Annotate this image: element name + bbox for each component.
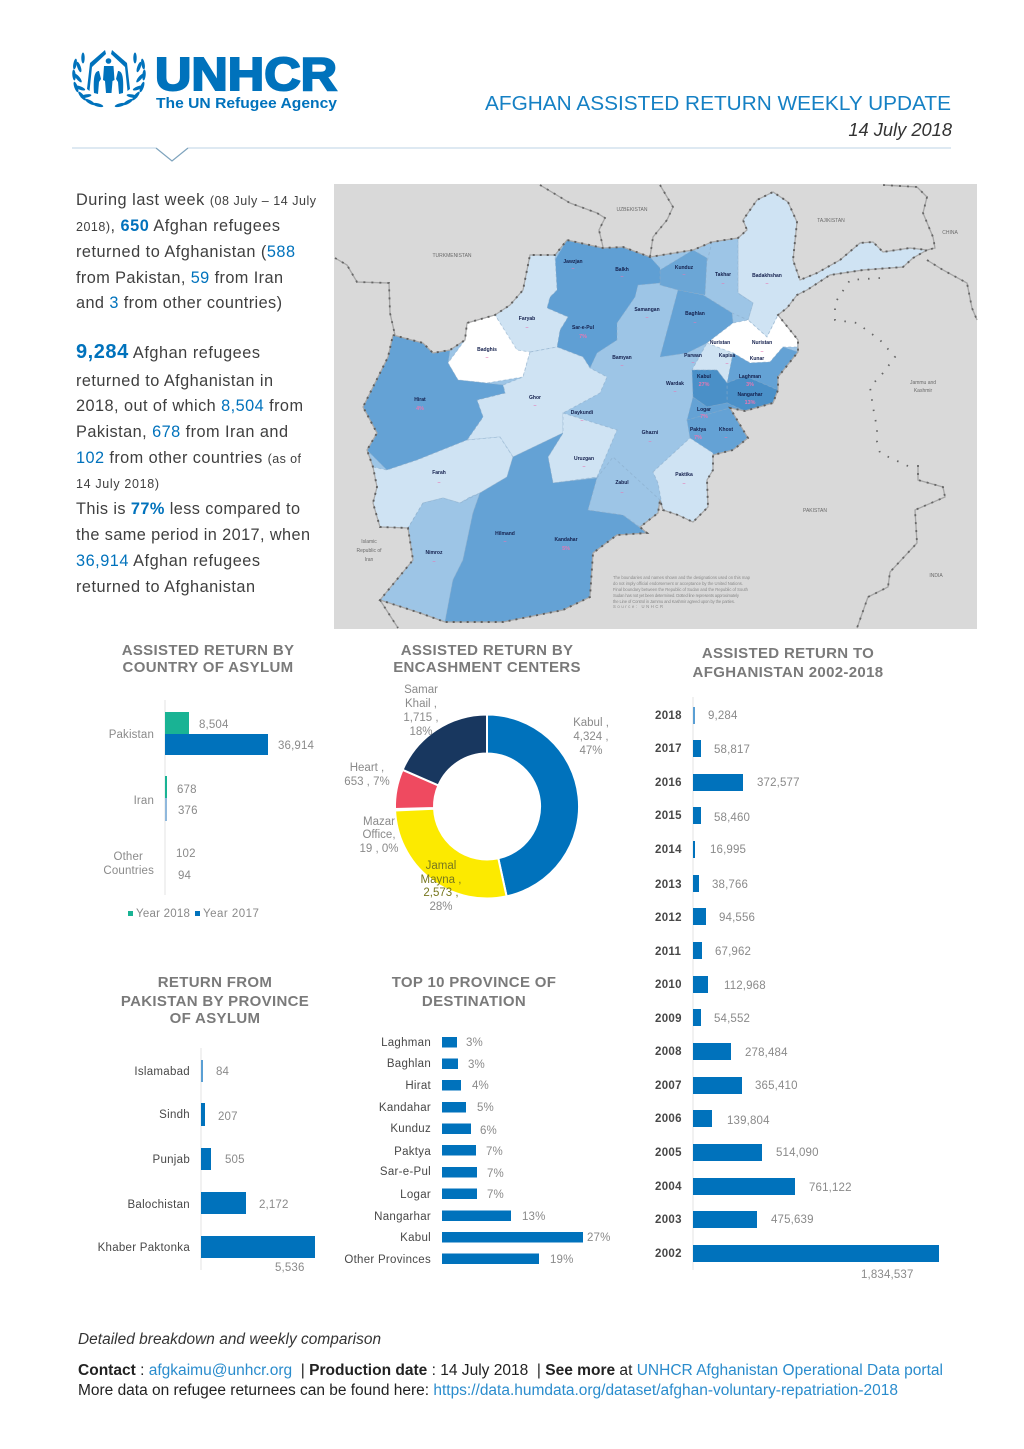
country labels: INDIA: [929, 573, 943, 579]
province labels: Bamyan: [612, 355, 632, 361]
year labels: [655, 710, 682, 1260]
province labels: 27%: [699, 382, 710, 388]
footer: contact line: Contact : afgkaimu@unhcr.org | Production date : 14 July 2018 | See more at UNHCR Afghanistan Operational Data portal: [78, 1362, 943, 1379]
province labels: 7%: [694, 435, 702, 441]
value labels: 5%: [477, 1102, 494, 1114]
category labels: Nangarhar: [374, 1211, 431, 1223]
province labels: Kapisa: [719, 353, 735, 359]
icon: chevron: [156, 148, 188, 161]
Afghanistan border: [363, 192, 927, 622]
chart: top 10 province of destination: [344, 974, 610, 1266]
province labels: 3%: [746, 382, 754, 388]
province: Nuristan and Panjshir: [707, 315, 798, 363]
year labels: 2013: [655, 879, 682, 891]
year labels: 2014: [655, 844, 682, 856]
donut labels: 28%: [429, 901, 453, 913]
value labels: 3%: [466, 1037, 483, 1049]
text block: 2018 summary: Pakistan, 678 from Iran and: [76, 423, 288, 441]
province labels: –: [534, 403, 536, 409]
year labels: 2011: [655, 946, 681, 958]
map disclaimer: The boundaries and names shown and the designations used on this map: [613, 575, 751, 580]
province: Takhar: [703, 238, 753, 320]
donut labels: 18%: [409, 726, 433, 738]
province labels: Nuristan: [710, 340, 730, 346]
province labels: Kabul: [697, 374, 712, 380]
text block: 2018 summary: returned to Afghanistan in: [76, 372, 273, 390]
category labels: Islamabad: [134, 1066, 190, 1078]
province: Paktika: [653, 438, 713, 522]
category labels: Paktya: [394, 1146, 431, 1158]
value labels: 475,639: [771, 1214, 814, 1226]
category labels: [344, 1037, 432, 1266]
map disclaimer: Final boundary between the Republic of Sudan and the Republic of South: [613, 587, 749, 592]
year labels: 2016: [655, 777, 682, 789]
province: Hirat: [363, 335, 505, 470]
logo tagline: The UN Refugee Agency: [156, 96, 337, 112]
year labels: 2002: [655, 1248, 682, 1260]
year labels: 2007: [655, 1080, 682, 1092]
category labels: Countries: [103, 865, 154, 877]
value labels: 505: [225, 1154, 245, 1166]
value labels: [216, 1066, 305, 1274]
province labels: –: [620, 274, 624, 280]
bars: [442, 1037, 583, 1264]
category labels: Punjab: [152, 1154, 190, 1166]
value labels: 678: [177, 784, 197, 796]
country labels: Islamic: [361, 539, 377, 545]
province labels: –: [674, 389, 676, 395]
province labels: [414, 259, 782, 565]
province labels: 13%: [745, 400, 756, 406]
value labels: 372,577: [757, 777, 800, 789]
legend: [128, 908, 259, 920]
chart title: ASSISTED RETURN BY: [122, 642, 294, 659]
country labels: [356, 207, 958, 579]
chart title: OF ASYLUM: [170, 1010, 260, 1027]
value labels: 9,284: [708, 710, 738, 722]
category labels: Other: [113, 851, 143, 863]
country labels: PAKISTAN: [803, 508, 827, 514]
province labels: Kandahar: [554, 537, 578, 543]
province labels: Kunduz: [675, 265, 694, 271]
value labels: 16,995: [710, 844, 746, 856]
header divider: [72, 147, 951, 149]
category labels: Iran: [134, 795, 154, 807]
province labels: Nuristan: [752, 340, 772, 346]
map disclaimer: Source: UNHCR: [613, 604, 663, 609]
category labels: Hirat: [405, 1080, 432, 1092]
province labels: Daykundi: [571, 410, 594, 416]
province labels: Samangan: [634, 307, 660, 313]
province labels: Laghman: [739, 374, 761, 380]
year labels: 2004: [655, 1181, 682, 1193]
year labels: 2017: [655, 743, 682, 755]
province labels: Farah: [432, 470, 446, 476]
country labels: Iran: [365, 557, 374, 563]
province labels: 7%: [700, 414, 708, 420]
year labels: 2018: [655, 710, 682, 722]
province labels: –: [760, 349, 764, 355]
category labels: Kunduz: [390, 1123, 431, 1135]
text block: last week summary: [76, 191, 317, 312]
chart: assisted return to Afghanistan 2002-2018: [655, 645, 939, 1281]
donut labels: Heart ,: [350, 762, 384, 774]
bars: Iran: [165, 776, 167, 821]
donut labels: Samar: [404, 684, 438, 696]
category labels: Other Provinces: [344, 1254, 431, 1266]
country labels: Republic of: [356, 548, 382, 554]
province: Baghlan: [660, 290, 733, 357]
donut labels: Khail ,: [405, 698, 437, 710]
province labels: Baghlan: [685, 311, 705, 317]
map disclaimer: Sudan has not yet been determined. Dotted line represents approximately: [613, 593, 740, 598]
province labels: –: [438, 480, 440, 486]
text block: 2018 summary: This is 77% less compared to: [76, 500, 300, 518]
province labels: Balkh: [615, 267, 629, 273]
category labels: Logar: [400, 1189, 431, 1201]
province labels: –: [580, 418, 584, 424]
logo wordmark: UNHCR: [155, 48, 337, 100]
donut labels: Mazar: [363, 816, 395, 828]
country labels: TAJIKISTAN: [817, 218, 845, 224]
province labels: –: [646, 315, 648, 321]
province labels: Hilmand: [495, 531, 515, 537]
text block: last week summary: returned to Afghanistan (588: [76, 243, 295, 261]
text block: last week summary: from Pakistan, 59 from Iran: [76, 269, 283, 287]
country base shape: [363, 192, 927, 622]
country labels: TURKMENISTAN: [432, 253, 472, 259]
country labels: Kashmir: [914, 388, 933, 394]
category labels: Khaber Paktonka: [98, 1242, 190, 1254]
value labels: 102: [176, 848, 196, 860]
value labels: 7%: [486, 1146, 503, 1158]
province labels: –: [726, 361, 728, 367]
category labels: [98, 1066, 190, 1254]
chart title: [121, 974, 309, 1027]
province: Balkh, Jawzjan, Sar-e-Pul, Samangan: [547, 240, 660, 368]
province labels: –: [766, 281, 768, 287]
donut labels: Mayna ,: [421, 874, 461, 886]
province labels: Ghazni: [642, 430, 659, 436]
legend: Year 2017: [203, 908, 259, 920]
category labels: Kabul: [400, 1232, 431, 1244]
value labels: 7%: [487, 1168, 504, 1180]
title: AFGHAN ASSISTED RETURN WEEKLY UPDATE: [485, 92, 951, 115]
province labels: –: [722, 281, 724, 287]
category labels: [103, 729, 154, 877]
category labels: Pakistan: [109, 729, 154, 741]
value labels: 3%: [468, 1059, 485, 1071]
bars: Pakistan: [165, 712, 268, 755]
map disclaimer: [613, 575, 751, 609]
province labels: Kunar: [750, 356, 764, 362]
province: Parwan and Kapisa: [692, 343, 733, 383]
chart title: [122, 642, 294, 676]
province labels: Zabul: [615, 480, 629, 486]
province: Ghor: [467, 347, 607, 457]
note: detailed breakdown: Detailed breakdown and weekly comparison: [78, 1331, 381, 1348]
chart: assisted return by country of asylum: [103, 642, 315, 920]
year labels: 2010: [655, 979, 682, 991]
donut labels: [344, 684, 609, 913]
chart title: [392, 974, 556, 1010]
value labels: 365,410: [755, 1080, 798, 1092]
value labels: 1,834,537: [861, 1269, 914, 1281]
province labels: Hirat: [414, 397, 426, 403]
province: Kabul: [692, 370, 727, 407]
provinces: [363, 192, 927, 622]
chart title: [393, 642, 581, 676]
donut labels: 653 , 7%: [344, 776, 390, 788]
value labels: 27%: [587, 1232, 610, 1244]
text block: last week summary: During last week (08 July – 14 July: [76, 191, 317, 209]
bars: [693, 707, 939, 1262]
value labels: 67,962: [715, 946, 751, 958]
date: 14 July 2018: [848, 119, 953, 140]
donut labels: 1,715 ,: [403, 712, 439, 724]
value labels: 58,460: [714, 812, 750, 824]
chart title: DESTINATION: [422, 993, 526, 1010]
province labels: Ghor: [529, 395, 541, 401]
province labels: Uruzgan: [574, 456, 594, 462]
category labels: Sar-e-Pul: [380, 1166, 431, 1178]
province labels: 5%: [562, 546, 570, 552]
text block: 2018 summary: 9,284 Afghan refugees: [76, 341, 260, 363]
value labels: [708, 710, 914, 1281]
province labels: –: [526, 325, 528, 331]
province labels: –: [432, 559, 436, 565]
chart title: COUNTRY OF ASYLUM: [123, 659, 293, 676]
year labels: 2009: [655, 1013, 682, 1025]
donut labels: 2,573 ,: [423, 887, 459, 899]
chart title: AFGHANISTAN 2002-2018: [693, 664, 883, 681]
province labels: –: [682, 272, 686, 278]
neighbouring borders: [335, 185, 977, 628]
legend: Year 2018: [136, 908, 190, 920]
province: Nangarhar: [727, 376, 778, 411]
province labels: –: [486, 355, 488, 361]
chart title: RETURN FROM: [158, 974, 272, 991]
province: Zabul: [588, 457, 660, 527]
value labels: 8,504: [199, 719, 229, 731]
value labels: 94: [178, 870, 192, 882]
text block: last week summary: and 3 from other countries): [76, 294, 282, 312]
province labels: –: [682, 481, 686, 487]
map disclaimer: the Line of Control in Jammu and Kashmir agreed upon by the parties.: [613, 599, 735, 604]
value labels: 19%: [550, 1254, 573, 1266]
province: Hilmand and Kandahar: [445, 433, 647, 622]
category labels: Laghman: [381, 1037, 431, 1049]
province labels: 7%: [579, 334, 587, 340]
donut labels: 47%: [579, 745, 603, 757]
year labels: 2012: [655, 912, 682, 924]
value labels: 58,817: [714, 744, 750, 756]
category labels: Balochistan: [127, 1199, 190, 1211]
icon: UNHCR emblem: [72, 50, 146, 108]
text block: 2018 summary: 102 from other countries (as of: [76, 449, 302, 467]
text block: 2018 summary: 14 July 2018): [76, 477, 159, 491]
value labels: 207: [218, 1111, 238, 1123]
category labels: Kandahar: [379, 1102, 431, 1114]
chart title: TOP 10 PROVINCE OF: [392, 974, 556, 991]
chart: assisted return by encashment centers: [344, 642, 609, 913]
province: Farah: [373, 437, 513, 528]
year labels: 2006: [655, 1113, 682, 1125]
province labels: –: [648, 439, 652, 445]
chart title: ASSISTED RETURN BY: [401, 642, 573, 659]
donut labels: 4,324 ,: [573, 731, 609, 743]
donut labels: 19 , 0%: [360, 843, 398, 855]
value labels: [466, 1037, 610, 1266]
province: Badghis: [448, 315, 530, 383]
value labels: 13%: [522, 1211, 545, 1223]
province labels: –: [692, 360, 694, 366]
province labels: Jawzjan: [563, 259, 583, 265]
footer: data link line: More data on refugee returnees can be found here: https://data.humdata.org/dataset/afghan-voluntary-repatriation-2018: [78, 1382, 898, 1399]
province labels: Logar: [697, 407, 711, 413]
value labels: 84: [216, 1066, 230, 1078]
province labels: Khost: [719, 427, 733, 433]
province labels: Nangarhar: [737, 392, 763, 398]
province: Badakhshan: [738, 192, 927, 337]
text block: 2018 summary: [76, 341, 310, 596]
province labels: Takhar: [715, 272, 731, 278]
value labels: 6%: [480, 1125, 497, 1137]
year labels: 2008: [655, 1046, 682, 1058]
year labels: 2005: [655, 1147, 682, 1159]
province labels: –: [724, 435, 728, 441]
value labels: 376: [178, 805, 198, 817]
province labels: Badghis: [477, 347, 497, 353]
category labels: Sindh: [159, 1109, 190, 1121]
value labels: 278,484: [745, 1047, 788, 1059]
map: Afghanistan provinces: [334, 184, 977, 629]
province labels: Faryab: [519, 316, 535, 322]
province labels: Nimroz: [426, 550, 443, 556]
value labels: 2,172: [259, 1199, 289, 1211]
province: Kunar and Laghman: [727, 347, 798, 390]
category labels: Baghlan: [387, 1058, 431, 1070]
value labels: [176, 719, 315, 882]
province labels: Wardak: [666, 381, 684, 387]
province labels: Badakhshan: [752, 273, 782, 279]
donut labels: Kabul ,: [573, 717, 609, 729]
province labels: –: [694, 320, 696, 326]
province labels: Paktika: [675, 472, 693, 478]
text block: last week summary: 2018), 650 Afghan refugees: [76, 217, 280, 235]
chart title: [693, 645, 883, 681]
province labels: –: [620, 363, 624, 369]
province: Logar: [687, 397, 745, 420]
value labels: 761,122: [809, 1182, 852, 1194]
province labels: –: [572, 266, 574, 272]
chart title: PAKISTAN BY PROVINCE: [121, 993, 309, 1010]
year labels: 2003: [655, 1214, 682, 1226]
value labels: 54,552: [714, 1013, 750, 1025]
province labels: –: [582, 464, 586, 470]
map background: [334, 184, 977, 629]
province labels: Sar-e-Pul: [572, 325, 595, 331]
text block: 2018 summary: returned to Afghanistan: [76, 578, 255, 596]
province: Paktya and Khost: [687, 408, 748, 455]
province: Kunduz: [660, 250, 707, 295]
province: Faryab: [495, 255, 568, 353]
country labels: Jammu and: [910, 380, 936, 386]
text block: 2018 summary: the same period in 2017, when: [76, 526, 310, 544]
province labels: Parwan: [684, 353, 702, 359]
value labels: 7%: [487, 1189, 504, 1201]
value labels: 4%: [472, 1080, 489, 1092]
donut: [395, 714, 579, 899]
chart: return from Pakistan by province of asylum: [98, 974, 315, 1274]
text block: 2018 summary: 36,914 Afghan refugees: [76, 552, 260, 570]
province labels: –: [620, 490, 624, 496]
value labels: 139,804: [727, 1115, 770, 1127]
province labels: 4%: [416, 406, 424, 412]
bars: [201, 1060, 315, 1258]
map disclaimer: do not imply official endorsement or acceptance by the United Nations.: [613, 581, 743, 586]
province: Nimroz: [380, 493, 480, 622]
value labels: 5,536: [275, 1262, 305, 1274]
value labels: 514,090: [776, 1147, 819, 1159]
province: Daykundi and Uruzgan: [548, 413, 617, 483]
year labels: 2015: [655, 810, 682, 822]
country labels: CHINA: [942, 230, 958, 236]
logo: UNHCR: [72, 48, 337, 112]
value labels: 94,556: [719, 912, 755, 924]
donut labels: Jamal: [426, 860, 456, 872]
value labels: 38,766: [712, 879, 748, 891]
donut labels: Office,: [362, 829, 396, 841]
chart title: ENCASHMENT CENTERS: [393, 659, 581, 676]
country labels: UZBEKISTAN: [616, 207, 648, 213]
value labels: 36,914: [278, 740, 315, 752]
province labels: Paktya: [690, 427, 706, 433]
province labels: –: [504, 539, 506, 545]
text block: 2018 summary: 2018, out of which 8,504 from: [76, 397, 303, 415]
value labels: 112,968: [724, 980, 766, 992]
chart title: ASSISTED RETURN TO: [702, 645, 874, 662]
